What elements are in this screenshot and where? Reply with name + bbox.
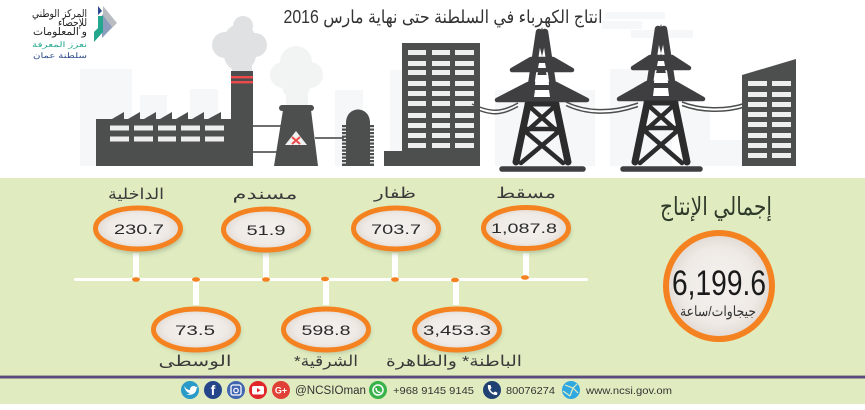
icon: youtube xyxy=(249,381,267,399)
region: Al Wusta: 73.5 xyxy=(175,322,215,338)
faded background skyline xyxy=(80,12,755,166)
timeline connector xyxy=(74,253,588,305)
total production circle xyxy=(666,233,772,339)
icon: tall building xyxy=(384,43,480,166)
region: Dhofar xyxy=(354,185,441,254)
icon: instagram xyxy=(227,381,245,399)
footer rule xyxy=(0,376,865,378)
power cables xyxy=(472,102,746,114)
logo text: المركز الوطني xyxy=(32,8,87,20)
region: Musandam: 51.9 xyxy=(246,222,286,238)
icon: factory xyxy=(96,71,253,166)
region: Al Wusta: الوسطى xyxy=(158,353,232,370)
region: Muscat: مسقط xyxy=(496,185,556,202)
region: Ash Sharqiyah: 598.8 xyxy=(302,322,351,338)
region: Muscat: 1,087.8 xyxy=(491,220,557,236)
footer: contact bar xyxy=(181,381,672,399)
region: Al Batinah and Adh Dhahirah: الباطنة* والظاهرة xyxy=(386,353,522,370)
icon: slanted-roof building xyxy=(742,59,796,166)
icon: storage tank xyxy=(342,110,374,166)
total production circle: 6,199.6 xyxy=(672,264,766,303)
icon: twitter xyxy=(181,381,199,399)
region: Musandam xyxy=(224,186,311,255)
icon: facebook: f xyxy=(211,382,216,398)
logo text: سلطنة عمان xyxy=(33,51,88,60)
icon: globe xyxy=(562,381,580,399)
region: Muscat xyxy=(484,185,571,253)
icon: facebook xyxy=(204,381,222,399)
region: Al Batinah and Adh Dhahirah: 3,453.3 xyxy=(423,322,491,338)
region: Dhofar: 703.7 xyxy=(371,221,421,237)
whatsapp number: +968 9145 9145 xyxy=(393,385,474,397)
logo text: و المعلومات xyxy=(33,26,87,38)
logo mark xyxy=(94,6,117,42)
logo text: للإحصاء xyxy=(58,17,87,29)
region: Dhofar: ظفار xyxy=(373,185,416,202)
toll free number: 80076274 xyxy=(506,385,555,397)
illustration: cooling tower smoke xyxy=(270,46,323,106)
icon: pylon 1 xyxy=(497,27,587,169)
region: Al Wusta xyxy=(154,309,241,370)
region: Ash Sharqiyah: الشرقية* xyxy=(294,353,358,370)
social handle: @NCSIOman xyxy=(295,385,366,397)
region: Ash Sharqiyah xyxy=(284,309,371,370)
website: www.ncsi.gov.om xyxy=(585,385,672,397)
region: Al Batinah and Adh Dhahirah xyxy=(386,309,522,370)
connecting pipes xyxy=(252,125,344,153)
region: Ad Dakhiliyah xyxy=(96,186,183,254)
region: Ad Dakhiliyah: 230.7 xyxy=(114,221,164,237)
icon: pylon 2 xyxy=(619,24,703,169)
icon: google plus xyxy=(272,381,290,399)
region: Musandam: مسندم xyxy=(232,186,298,203)
title: انتاج الكهرباء في السلطنة حتى نهاية مارس 2016 xyxy=(284,7,602,28)
icon: cooling tower xyxy=(274,105,318,166)
logo text xyxy=(32,8,88,60)
region: Ad Dakhiliyah: الداخلية xyxy=(108,186,164,203)
icon: phone xyxy=(483,381,501,399)
icon: whatsapp xyxy=(369,381,387,399)
logo text: نعزز المعرفة xyxy=(32,40,87,49)
heading: total production: إجمالي الإنتاج xyxy=(660,193,772,222)
logo: National Centre for Statistics and Information xyxy=(32,6,117,60)
panel: green data band xyxy=(0,178,865,404)
total production circle: جيجاوات/ساعة xyxy=(680,303,756,320)
illustration: factory smoke xyxy=(212,16,267,71)
icon: google plus: G+ xyxy=(275,386,287,396)
